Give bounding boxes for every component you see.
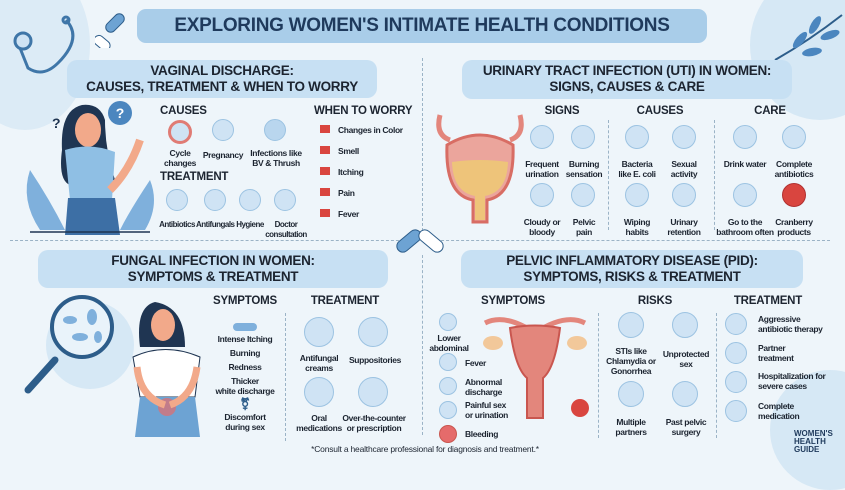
list: fungal symptoms: Discomfort	[224, 412, 266, 422]
panel: PID: Bleeding	[465, 429, 498, 439]
labels: care: Drink water	[724, 159, 766, 169]
background blob top-right	[750, 0, 845, 120]
logo: GUIDE	[794, 445, 819, 454]
panel: fungal infection	[24, 250, 406, 441]
heading: vaginal discharge: VAGINAL DISCHARGE:	[150, 63, 294, 78]
subheading: treatment: TREATMENT	[734, 295, 802, 307]
labels: causes: like E. coli	[618, 169, 656, 179]
label: cycle changes: Cycle	[170, 148, 190, 158]
label: pregnancy: Pregnancy	[203, 150, 243, 160]
panel: UTI: sensation	[566, 169, 602, 179]
heading: PID: PELVIC INFLAMMATORY DISEASE (PID):	[506, 253, 758, 268]
label: infections: BV & Thrush	[252, 158, 300, 168]
panel: PID: Multiple	[616, 417, 646, 427]
panel: UTI: Urinary	[670, 217, 698, 227]
label: cycle changes: changes	[164, 158, 196, 168]
title: EXPLORING WOMEN'S INTIMATE HEALTH CONDITIONS	[174, 15, 670, 36]
illustration: woman	[132, 302, 200, 437]
panel: PID: surgery	[672, 427, 700, 437]
icon: leaves top-right	[774, 14, 842, 60]
labels: signs: Frequent	[525, 159, 559, 169]
panel: UTI: Pelvic	[573, 217, 595, 227]
panel: UTI: products	[777, 227, 811, 237]
label: doctor consultation: Doctor	[275, 220, 297, 229]
panel: PID: Hospitalization for	[758, 371, 826, 381]
subheading: causes: CAUSES	[637, 105, 683, 117]
icons: causes	[625, 125, 649, 149]
labels: risks: Gonorrhea	[611, 366, 651, 376]
panel: vaginal discharge	[26, 60, 412, 239]
panel: PID: partners	[615, 427, 647, 437]
panel: PID: severe cases	[758, 381, 807, 391]
heading: vaginal discharge: CAUSES, TREATMENT & WHEN TO WORRY	[86, 79, 358, 94]
dividers	[422, 58, 423, 236]
background blob top-left	[0, 0, 90, 130]
icons: signs	[530, 125, 554, 149]
panel: UTI: Complete	[776, 159, 812, 169]
labels: causes	[618, 159, 656, 179]
heading: UTI: URINARY TRACT INFECTION (UTI) IN WOMEN:	[483, 63, 771, 78]
heading: vaginal discharge	[67, 60, 377, 98]
list: fungal symptoms: Thicker	[231, 376, 259, 386]
panel: UTI: retention	[667, 227, 701, 237]
panel: fungal infection: Over-the-counter	[342, 413, 406, 423]
labels: risks: STIs like	[615, 346, 647, 356]
panel: PID: Complete	[758, 401, 794, 411]
panel: PID: or urination	[465, 410, 508, 420]
logo	[794, 429, 833, 454]
label: hygiene: Hygiene	[236, 220, 264, 229]
panel: fungal infection: Oral	[311, 413, 327, 423]
panel: UTI: bloody	[529, 227, 555, 237]
panel: UTI: antibiotics	[775, 169, 813, 179]
label: cycle changes	[164, 148, 196, 168]
list: warning flags: Smell	[338, 146, 359, 156]
panel: fungal infection: Suppositories	[349, 355, 401, 365]
label: infections: Infections like	[250, 148, 302, 158]
illustration: magnifier	[24, 295, 134, 394]
icons: fungal treatment	[304, 317, 334, 347]
list: fungal symptoms: during sex	[225, 422, 265, 432]
icon: stethoscope	[14, 16, 74, 74]
list: fungal symptoms: Intense Itching	[218, 334, 272, 344]
labels: risks	[606, 346, 656, 376]
labels: risks: Chlamydia or	[606, 356, 656, 366]
labels: fungal treatment	[300, 353, 338, 373]
panel: PID: Partner	[758, 343, 785, 353]
list: fungal symptoms	[216, 323, 274, 432]
labels: causes: Bacteria	[622, 159, 652, 169]
panel: PID: abdominal	[429, 343, 469, 353]
labels: signs	[525, 159, 559, 179]
label: doctor consultation	[265, 220, 307, 239]
list: warning flags	[320, 125, 403, 219]
labels: signs: urination	[525, 169, 559, 179]
panel: UTI: Cloudy or	[524, 217, 560, 227]
footer note: *Consult a healthcare professional for diagnosis and treatment.*	[311, 444, 539, 454]
labels: fungal treatment: creams	[305, 363, 333, 373]
icons: risks	[618, 312, 644, 338]
list: warning flags: Fever	[338, 209, 359, 219]
heading: fungal	[38, 250, 388, 288]
subheading: treatment: TREATMENT	[311, 295, 379, 307]
subheading: symptoms: SYMPTOMS	[481, 295, 545, 307]
illustration: bladder	[436, 114, 524, 224]
title	[137, 9, 707, 43]
list: fungal symptoms: Redness	[228, 362, 261, 372]
heading: UTI: SIGNS, CAUSES & CARE	[549, 79, 705, 94]
icon: antibiotics	[166, 189, 188, 211]
panel: PID: Lower	[437, 333, 461, 343]
panel: fungal infection: medications	[296, 423, 342, 433]
logo: WOMEN'S	[794, 429, 833, 438]
subheading: causes: CAUSES	[160, 105, 207, 117]
label: doctor consultation: consultation	[265, 230, 307, 239]
panel: PID: antibiotic therapy	[758, 324, 823, 334]
panel: UTI: pain	[576, 227, 592, 237]
subheading: signs: SIGNS	[545, 105, 579, 117]
illustration: uterus	[483, 317, 589, 419]
panel: UTI: bathroom often	[716, 227, 774, 237]
icon: pills top-left	[95, 13, 125, 48]
list: fungal symptoms: white discharge	[216, 386, 274, 396]
heading: fungal: FUNGAL INFECTION IN WOMEN:	[111, 253, 315, 268]
icon: cycle	[168, 120, 192, 144]
label: antifungals: Antifungals	[196, 220, 234, 229]
list: fungal symptoms: ⚧	[240, 397, 250, 411]
icons: care	[733, 125, 757, 149]
list: warning flags: Itching	[338, 167, 363, 177]
panel: UTI: Wiping	[624, 217, 650, 227]
panel: UTI: Burning	[569, 159, 599, 169]
panel: PID: Painful sex	[465, 400, 506, 410]
list: warning flags: Pain	[338, 188, 355, 198]
subheading: risks: RISKS	[638, 295, 672, 307]
icon: pills center	[396, 229, 444, 253]
heading: PID	[461, 250, 803, 288]
icon: infections	[264, 119, 286, 141]
panel: PID: treatment	[758, 353, 794, 363]
illustration: woman thinking: ?	[116, 105, 124, 121]
background blob bottom-right	[770, 370, 845, 490]
illustration: woman thinking: ?	[52, 115, 61, 131]
icon: hygiene	[239, 189, 261, 211]
panel: PID: Fever	[465, 358, 486, 368]
panel: PID: Aggressive	[758, 314, 800, 324]
list: PID symptoms	[439, 313, 457, 331]
panel: UTI: activity	[671, 169, 697, 179]
labels: fungal treatment: Antifungal	[300, 353, 338, 363]
heading: fungal: SYMPTOMS & TREATMENT	[128, 269, 298, 284]
panel: UTI: Sexual	[671, 159, 697, 169]
subheading: symptoms: SYMPTOMS	[213, 295, 277, 307]
subheading: care: CARE	[754, 105, 786, 117]
list: warning flags: Changes in Color	[338, 125, 403, 135]
panel: PID: Abnormal	[465, 377, 502, 387]
subheading: when to worry: WHEN TO WORRY	[314, 105, 412, 117]
panel: PID: medication	[758, 411, 799, 421]
label: antibiotics: Antibiotics	[159, 220, 195, 229]
panel: PID: discharge	[465, 387, 502, 397]
panel: UTI: habits	[626, 227, 648, 237]
panel: UTI: Go to the	[728, 217, 762, 227]
panel: UTI	[436, 60, 814, 237]
logo: HEALTH	[794, 437, 826, 446]
panel: PID: Unprotected	[663, 349, 709, 359]
icon: antifungals	[204, 189, 226, 211]
list: fungal symptoms: Burning	[230, 348, 260, 358]
label: infections	[250, 148, 302, 168]
panel: PID	[429, 250, 826, 443]
icon: pregnancy	[212, 119, 234, 141]
panel: fungal infection: or prescription	[347, 423, 401, 433]
list: PID treatment	[725, 313, 747, 335]
heading: PID: SYMPTOMS, RISKS & TREATMENT	[523, 269, 741, 284]
panel: PID: sex	[679, 359, 693, 369]
panel: PID: Past pelvic	[666, 417, 706, 427]
icon: doctor	[274, 189, 296, 211]
illustration: woman thinking	[26, 101, 154, 235]
subheading: treatment: TREATMENT	[160, 171, 228, 183]
panel: UTI: Cranberry	[775, 217, 813, 227]
heading: UTI	[462, 60, 792, 99]
